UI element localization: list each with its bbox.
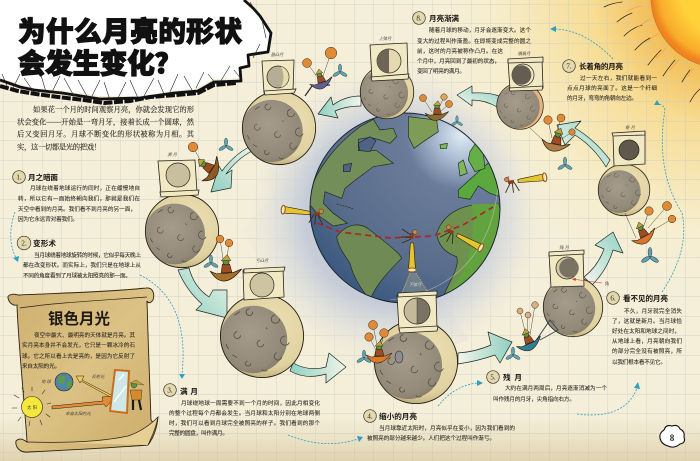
scroll sun diagram: 太 阳 [27,404,37,411]
arrow 3 to 4 [178,268,227,318]
section 7: horned moon: 过一天左右，我们就能看到一 [580,74,657,82]
section 1: dark side of the moon: 月球在绕着地球运行的同时，正在缓慢地自 [30,184,140,192]
section 8: waxing moon: 月亮渐满 [429,13,459,23]
section 2: shape shifting [17,236,141,280]
scroll text: 夜空中最大、最明亮的天体就是月亮。其 [34,331,135,339]
section 1: dark side of the moon [13,171,140,223]
arrow 4 to 5 [290,353,346,383]
scroll sun diagram: 来自太阳的光 [65,411,91,416]
card: full: 满 月 [167,152,178,157]
moon: waning gibbous [220,258,304,378]
section 7: horned moon: 长着角的月亮 [579,61,623,71]
page number cloud: 8 [670,433,675,443]
vehicle near waning crescent [505,302,558,360]
title text: 会发生变化？ [18,48,182,79]
section 6: invisible moon: 以我们根本看不见它。 [612,358,666,366]
scroll earth [55,373,73,391]
scroll mirror [110,370,129,413]
section 5: waning crescent [487,371,607,403]
card: new: 新 月 [625,125,636,130]
section 8: waxing moon [413,12,531,75]
south america [337,225,402,300]
arrow 5 to 6 [458,332,512,364]
scroll text: 实月亮本身并不会发光，它只是一颗冰冷的石 [22,341,135,349]
vehicle near waning gibbous [203,235,242,281]
section 1: dark side of the moon: 因为它永远背对着我们。 [18,215,78,223]
intro paragraph: 如果花一个月的时间观察月亮，你就会发现它的形 [33,105,195,115]
moon: waxing gibbous [241,52,316,165]
vehicle near full [188,138,234,186]
scroll sunlight arrow [52,396,116,409]
vehicle near first quarter [420,94,463,126]
section 6: invisible moon: 看不见的月亮 [623,293,668,303]
scroll reflected light arrow [76,376,115,399]
card: last quarter: 下弦月 [409,282,422,287]
britain [458,160,467,176]
telescope bottom [401,229,418,272]
section 2: shape shifting: 2. [21,240,27,248]
vehicle near last quarter [356,320,403,363]
telescope lower right [439,223,485,258]
section 4: shrinking moon: 当月球靠近太阳时，月亮似乎在变小，因为我们看到的 [379,424,515,432]
vehicle near waxing crescent [530,114,575,170]
section 5: waning crescent: 5. [490,374,496,382]
section 3: full moon: 满 月 [180,386,198,396]
great lakes [358,137,376,152]
panel: silver moonlight scroll [8,288,158,452]
section 3: full moon: 的整个过程每个月都会发生。当月球和太阳分别在地球两侧 [169,409,320,417]
section 3: full moon: 时，我们可以看到月球完全被照亮的样子。我们看到的那个 [169,419,320,427]
telescope left [280,204,325,226]
scroll sun diagram [12,370,144,426]
iceland [440,143,447,149]
section 6: invisible moon: 不久，月牙就完全消失 [624,307,682,315]
section 8: waxing moon: 前，这时的月亮被称作凸月。在这 [417,47,503,55]
earth [309,113,503,303]
page number cloud [660,425,684,447]
europe [458,160,502,199]
section 3: full moon [164,384,320,437]
section 8: waxing moon: 随着月球的移动，月牙会逐渐变大。这个 [429,26,531,34]
caribbean islands [337,204,353,209]
section 7: horned moon: 点点月球的亮面了。这是一个纤细 [567,84,657,92]
moon: new [598,125,650,216]
scroll text [22,331,135,370]
card: waning crescent: 残 月 [559,245,570,250]
moon: first quarter [359,36,414,119]
section 3: full moon: 3. [167,386,173,394]
scandinavia [468,142,485,172]
section 6: invisible moon: 了，这就是新月。当月球恰 [612,317,682,325]
section 3: full moon: 月球绕地球一周需要不到一个月的时间，因此月相变化 [181,399,320,407]
annotation: horn: 角 [605,280,609,287]
section 6: invisible moon [607,292,682,366]
section 5: waning crescent: 残 月 [503,372,522,382]
section 8: waxing moon: 8. [416,14,422,22]
section 6: invisible moon: 好处在太阳和地球之间时， [612,327,680,335]
section 6: invisible moon: 从地球上看，月亮朝向我们 [612,337,682,345]
section 8: waxing moon: 变回了明亮的满月。 [417,67,465,75]
balloon vehicles [188,47,676,363]
arrow 8 to 1 [457,86,499,107]
telescope observers [280,171,548,293]
section 4: shrinking moon: 缩小的月亮 [379,411,417,421]
title text: 为什么月亮的形状 [18,16,242,47]
card: first quarter: 上弦月 [379,36,392,41]
arrow 7 to 8 [557,121,610,167]
observation route dashed line [317,207,493,238]
section 1: dark side of the moon: 月之暗面 [28,172,58,182]
intro paragraph: 状会变化——开始是一弯月牙，接着长成一个圆球，然 [17,118,195,128]
north america [309,119,397,226]
earth shadow halo [240,65,545,370]
arrow 6 to 7 [584,232,623,285]
section 2: shape shifting: 当月球绕着地球旋转的时候，它似乎每天晚上 [34,251,141,259]
intro paragraph: 后又变回月牙。月球不断变化的形状被称为月相。其 [17,130,195,138]
title cloud [0,0,271,103]
section 5: waning crescent: 叫作残月的月牙，尖角指向右方。 [493,395,575,403]
section 1: dark side of the moon: 1. [16,174,22,182]
arrow 1 to 2 [318,96,361,118]
scroll sun diagram: 地 球 [41,379,52,384]
intro paragraph: 实，这一切都是光的把戏！ [17,142,101,152]
card: waxing gibbous: 盈凸月 [271,52,284,57]
intro paragraph [17,105,195,152]
section 2: shape shifting: 不同的角度看到了月球被太阳照亮的那一面。 [23,272,131,280]
sun [604,0,700,102]
section 3: full moon: 完整的圆盘，叫作满月。 [169,429,228,437]
section 7: horned moon: 的月牙，弯弯的角朝向左边。 [567,94,637,102]
section 2: shape shifting: 都在改变形状。而实际上，我们只是在地球上从 [23,261,141,269]
moon: waning crescent [542,245,609,337]
section 4: shrinking moon: 被照亮的部分越来越少。人们把这个过程叫作渐亏。 [367,434,495,442]
vehicle near waxing gibbous [302,47,348,96]
section 4: shrinking moon: 4. [367,412,373,420]
scroll character [131,382,137,388]
section 5: waning crescent: 大约在满月两周后，月亮逐渐消减为一个 [505,384,607,392]
title text [18,16,242,79]
section 6: invisible moon: 6. [610,294,616,302]
section 2: shape shifting: 变形术 [33,238,56,248]
section 8: waxing moon: 个月中，月亮回到了最初的状态， [417,57,500,65]
arrow 2 to 3 [211,147,252,192]
section 7: horned moon: 7. [566,62,572,70]
greenland [408,117,438,148]
scroll text: 球。它之所以看上去是亮的，是因为它反射了 [22,352,135,360]
section 1: dark side of the moon: 转，所以它有一面始终朝向我们，那就是我们在 [18,194,140,202]
moon: last quarter [374,282,458,404]
section 6: invisible moon: 的部分完全没有被照亮，所 [612,347,682,355]
arrows: moon orbit sections [178,86,623,383]
section 1: dark side of the moon: 天空中看到的月亮。我们看不到月亮的另一面， [18,205,136,213]
section 7: horned moon [563,60,657,102]
moon: waxing crescent [496,51,543,129]
scroll sun diagram: 反射光 [92,374,105,379]
scroll heading: 银色月光 [48,309,110,328]
scroll text: 来自太阳的光。 [22,362,60,370]
africa [437,203,503,297]
moon: full [144,152,219,268]
telescope right [503,171,548,194]
section 8: waxing moon: 变大的过程叫作渐盈。在即将变成完整的圆之 [417,37,531,45]
card: waning gibbous: 亏凸月 [256,258,269,263]
card: waxing crescent: 娥眉月 [518,51,531,56]
section 4: shrinking moon [364,410,515,442]
vehicle near new [625,202,676,263]
